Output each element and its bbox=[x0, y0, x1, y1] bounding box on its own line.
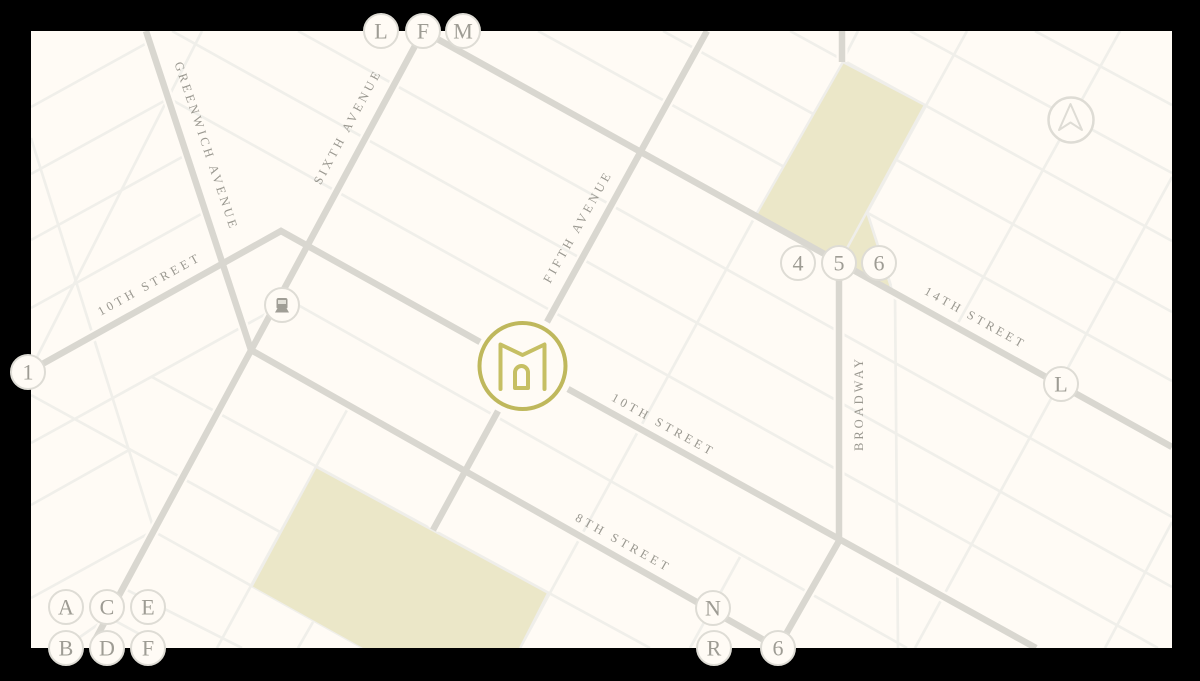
subway stop E bbox=[131, 590, 165, 624]
subway stop 5: 5 bbox=[834, 250, 844, 276]
subway stop E: E bbox=[141, 594, 155, 620]
label: Broadway: BROADWAY bbox=[852, 359, 866, 451]
subway stop M: M bbox=[453, 18, 473, 44]
subway stop M bbox=[446, 14, 480, 48]
subway stop N bbox=[696, 591, 730, 625]
subway stop B bbox=[49, 631, 83, 665]
subway stop A: A bbox=[58, 594, 74, 620]
subway stop 6 north: 6 bbox=[874, 250, 884, 276]
subway stop 6 south bbox=[761, 631, 795, 665]
label: 8th Street: 8TH STREET bbox=[573, 511, 671, 574]
label: Greenwich Avenue: GREENWICH AVENUE bbox=[172, 60, 240, 230]
subway stop R: R bbox=[707, 636, 722, 660]
subway stop 6 north bbox=[862, 246, 896, 280]
logo: building marker bbox=[480, 323, 566, 409]
subway stop F bbox=[406, 14, 440, 48]
subway stop 1 bbox=[11, 355, 45, 389]
subway stop 4 bbox=[781, 246, 815, 280]
label: 10th Street west: 10TH STREET bbox=[95, 251, 201, 319]
subway stop L: L bbox=[374, 18, 388, 44]
subway stop F south: F bbox=[142, 636, 154, 660]
park: south square bbox=[252, 467, 548, 648]
subway stop 4: 4 bbox=[792, 250, 804, 276]
subway stop R bbox=[697, 631, 731, 665]
icon: train bbox=[265, 288, 299, 322]
subway stop 6 south: 6 bbox=[772, 636, 784, 660]
subway stop 1: 1 bbox=[22, 360, 34, 384]
subway stop D bbox=[90, 631, 124, 665]
label: 10th Street east: 10TH STREET bbox=[609, 390, 715, 458]
subway stop C: C bbox=[100, 594, 114, 620]
subway stop N: N bbox=[705, 596, 721, 620]
subway stop L east: L bbox=[1054, 372, 1068, 396]
subway stop F: F bbox=[417, 18, 429, 44]
park: north square bbox=[757, 62, 925, 292]
label: 14th Street: 14TH STREET bbox=[922, 284, 1026, 350]
subway stop 5 bbox=[822, 246, 856, 280]
icon: compass north arrow bbox=[1048, 98, 1094, 142]
subway stop L east bbox=[1044, 367, 1078, 401]
label: Sixth Avenue: SIXTH AVENUE bbox=[311, 69, 383, 187]
label: Fifth Avenue: FIFTH AVENUE bbox=[540, 170, 614, 285]
subway stop D: D bbox=[99, 636, 115, 660]
subway stop F south bbox=[131, 631, 165, 665]
subway stop C bbox=[90, 590, 124, 624]
subway stop A bbox=[49, 590, 83, 624]
subway stop L bbox=[364, 14, 398, 48]
subway stop B: B bbox=[59, 636, 73, 660]
